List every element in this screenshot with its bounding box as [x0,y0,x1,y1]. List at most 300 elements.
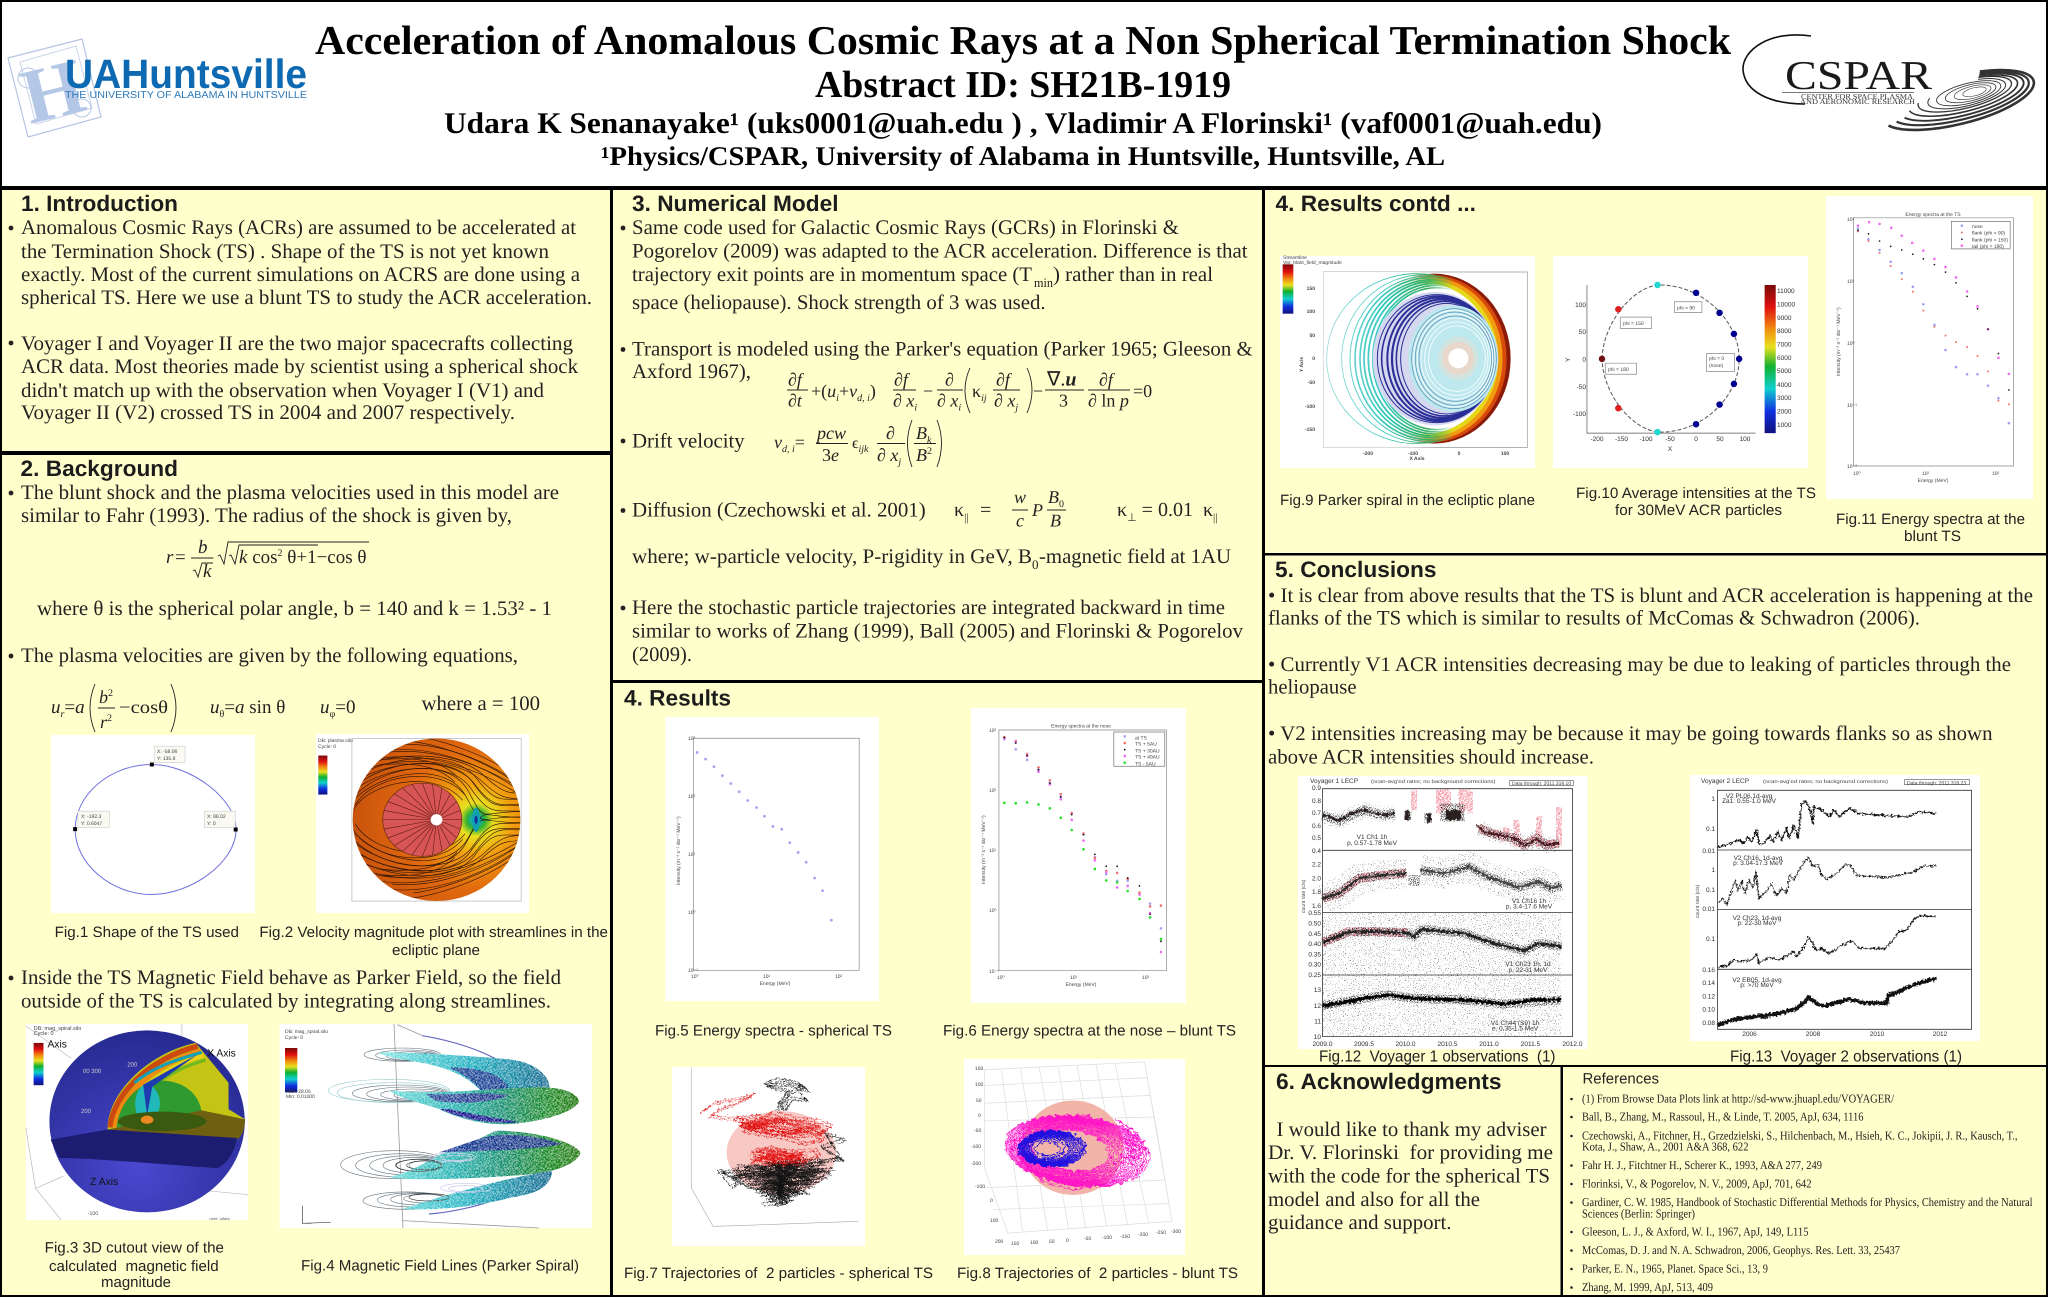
figure 4: parker spiral [280,1024,592,1228]
equation: plasma velocities: 2 [107,713,112,724]
figure 8: trajectories blunt: 100 [975,1082,984,1088]
equation: diffusion: κ [1117,499,1127,521]
figure 13: voyager 2: Voyager 2 LECP [1701,778,1749,785]
equation: parker transport: ∇.u [1046,369,1077,391]
figure 9: parker spiral ecliptic: Var: blast_field_magnitude [1283,260,1342,266]
figure 9: parker spiral ecliptic: -100 [1408,451,1418,457]
figure 11: blunt TS spectra: tail (phi = 180) [1972,244,2004,250]
text block: introduction bullets: spherical TS. Here we use a blunt TS to study the ACR acceleration. [21,287,592,309]
equation: diffusion: || [964,512,968,524]
figure 3: 3D cutout: Axis [47,1038,67,1050]
equation: shock radius: k cos [239,547,278,568]
figure 12: voyager 1: V1 Ch23 1h, 1d [1505,961,1551,968]
figure 12: voyager 1: 0.50 [1308,920,1321,928]
text block: reference list: Florinksi, V., & Pogorelov, N. V., 2009, ApJ, 701, 642 [1582,1177,1812,1191]
figure 11: blunt TS spectra: 10⁰ [1853,471,1861,477]
figure 3: 3D cutout: Z Axis [90,1175,118,1187]
text block: acknowledgments: model and also for all the [1268,1189,1480,1211]
figure 1: shape of TS: Y: 135.8 [157,756,176,762]
panel: 2. Background [2,455,610,1295]
figure 8: trajectories blunt: 150 [975,1066,984,1072]
text block: same code: space (heliopause). Shock strength of 3 was used. [632,292,1046,314]
figure 3: 3D cutout: X Axis [207,1047,236,1059]
figure 8: trajectories blunt: -200 [1138,1232,1148,1238]
text block: stochastic: (2009). [632,644,692,666]
figure 13: voyager 2: 0.08 [1702,1020,1715,1027]
figure 8: trajectories blunt: 100 [1030,1240,1039,1246]
figure 9: parker spiral ecliptic: 150 [1307,286,1315,292]
text block: where w-particle: 0 [1032,557,1038,572]
text block: introduction bullets: Voyager I and Voyager II are the two major spacecrafts collecting [21,333,573,355]
figure 12: voyager 1: 1.8 [1312,889,1321,896]
figure 13: voyager 2 [1690,775,1980,1041]
figure 12: voyager 1: p, 0.57-1.78 MeV [1347,840,1398,847]
equation: parker transport: − [923,381,933,401]
text block: introduction bullets: exactly. Most of the current simulations on ACRS are done using a [21,264,580,286]
logo: CSPAR: AND AERONOMIC RESEARCH [1800,97,1916,106]
figure 1: shape of TS: Y: 0 [207,821,216,827]
figure 12: voyager 1: 11 [1314,1018,1321,1026]
figure 6: blunt spectra: Energy spectra at the nose [1051,724,1111,730]
equation: diffusion: || [1213,512,1217,524]
text block: where theta: where θ is the spherical polar angle, b = 140 and k = 1.53² - 1 [37,598,552,620]
figure 8: trajectories blunt: -300 [1171,1229,1181,1235]
equation: shock radius: b [198,537,208,558]
figure 6: blunt spectra: 10¹ [1070,975,1078,981]
figure 10: average intensities: X [1668,446,1673,453]
equation: parker transport: i [836,393,839,404]
figure 13: voyager 2: Za1: 0.55-1.0 MeV [1722,798,1777,805]
caption: fig 9: Fig.9 Parker spiral in the ecliptic plane [1280,492,1535,509]
figure 8: trajectories blunt: 50 [976,1098,982,1104]
text block: acknowledgments: with the code for the spherical TS [1268,1166,1550,1188]
equation: drift velocity: ijk [858,444,869,455]
figure 8: trajectories blunt: 0 [978,1113,981,1119]
equation: drift velocity: ϵ [852,435,858,452]
equation: plasma velocities: =0 [335,697,356,718]
equation: plasma velocities: = [224,697,235,718]
figure 13: voyager 2: 0.1 [1706,826,1715,833]
figure 5: spherical spectra: Energy (MeV) [760,981,791,987]
caption: fig 8: Fig.8 Trajectories of 2 particles - blunt TS [957,1265,1238,1282]
figure 5: spherical spectra: 10⁰ [691,974,699,980]
equation: parker transport: v [849,381,857,401]
figure 6: blunt spectra: 10¹ [989,848,997,854]
figure 6: blunt spectra: 10² [1142,975,1150,981]
figure 12: voyager 1: Data through: 2011.319.10 [1512,781,1571,787]
figure 9: parker spiral ecliptic: -50 [1308,380,1315,386]
figure 13: voyager 2: 0.10 [1702,1006,1715,1014]
caption: fig 12: Fig.12 Voyager 1 observations (1) [1319,1049,1556,1066]
figure 9: parker spiral ecliptic: 50 [1309,333,1315,339]
figure 10: average intensities: phi = 90 [1677,306,1695,312]
figure 6: blunt spectra: Intensity (m⁻² s⁻¹ dsr⁻¹ MeV⁻¹) [981,815,987,884]
logo: UAHuntsville: UAHuntsville [65,51,307,97]
caption: fig 2: ecliptic plane [392,942,480,959]
figure 12: voyager 1: 2010.5 [1438,1041,1458,1048]
text block: parker field: Inside the TS Magnetic Field behave as Parker Field, so the field [21,967,562,989]
equation: parker transport: ∂ ln p [1088,391,1129,411]
figure 10: average intensities: phi = 0 [1709,356,1724,362]
panel: 5. Conclusions [1265,556,2046,1066]
figure 12: voyager 1: V1 Ch1 1h [1357,834,1388,841]
equation: plasma velocities: a [75,697,85,718]
equation: parker transport: κ [972,381,981,401]
figure 6: blunt spectra: TS - 5AU [1135,762,1156,768]
equation: parker transport: j [1013,403,1018,414]
caption: fig 13: Fig.13 Voyager 2 observations (1) [1730,1049,1962,1066]
figure 9: parker spiral ecliptic: 100 [1307,309,1315,315]
text block: transport [621,339,1253,383]
equation: shock radius: r [166,547,174,568]
equation: plasma velocities: where a = 100 [422,693,540,715]
text block: same code: Pogorelov (2009) was adapted to the ACR acceleration. Difference is that [632,241,1248,263]
figure 12: voyager 1: 2.0 [1312,876,1321,882]
text block: stochastic [621,597,1244,666]
text block: conclusion bullets [1268,585,2033,769]
figure 10: average intensities: -50 [1665,436,1675,443]
logo: CSPAR: CSPAR [1785,52,1933,98]
figure 12: voyager 1: 10 [1314,1034,1321,1041]
text block: blunt shock [9,482,559,527]
figure 10: average intensities: phi = 150 [1623,321,1644,327]
figure 7: trajectories spherical [672,1067,865,1246]
equation: parker transport: ∂f [996,370,1013,390]
equation: diffusion: κ [954,499,964,521]
figure 10: average intensities: -100 [1639,436,1653,443]
equation: plasma velocities: u [210,697,220,718]
figure 10: average intensities: 7000 [1777,342,1792,348]
text block: reference list: Kota, J., Shaw, A., 2001 A&A 368, 622 [1582,1140,1748,1154]
figure 12: voyager 1: 0.8 [1312,798,1321,805]
panel: 1. Introduction [2,190,610,451]
equation: drift velocity: 3e [822,445,839,465]
figure 12: voyager 1: 12 [1314,1003,1321,1010]
equation: diffusion: P [1031,500,1043,520]
caption: fig 3: magnitude [101,1274,171,1291]
figure 9: parker spiral ecliptic: X Axis [1409,456,1425,462]
equation: drift velocity: B [916,445,927,465]
text block: where w-particle: where; w-particle velocity, P-rigidity in GeV, B [632,546,1032,568]
figure 4: parker spiral: Max: 28.05 [286,1089,311,1095]
equation: drift velocity: = [795,432,805,452]
figure 11: blunt TS spectra: Energy (MeV) [1918,478,1949,484]
figure 3: 3D cutout: 200 [81,1108,91,1115]
figure 13: voyager 2: 0.1 [1706,936,1715,943]
caption: fig 10 [1576,485,1816,519]
equation: parker transport: ∂f [894,370,911,390]
figure 3: 3D cutout: Cycle: 0 [34,1030,54,1036]
equation: plasma velocities: r [100,712,107,732]
equation: shock radius: k [203,561,212,582]
heading: results contd: 4. Results contd ... [1276,191,1476,216]
text block: plasma velocities: The plasma velocities are given by the following equations, [21,645,518,667]
figure 2: velocity magnitude [316,734,529,913]
figure 12: voyager 1: 0.6 [1312,823,1321,830]
text block: introduction bullets: Voyager II (V2) crossed TS in 2004 and 2007 respectively. [21,402,515,424]
figure 10: average intensities: -200 [1590,436,1604,443]
figure 13: voyager 2: 0.1 [1706,887,1715,894]
figure 5: spherical spectra: 10¹ [688,852,696,858]
figure 11: blunt TS spectra: 10¹ [1922,471,1930,477]
text block: parker field [9,967,562,1012]
figure 8: trajectories blunt: -200 [971,1161,981,1167]
caption: fig 3 [45,1240,224,1291]
text block: acknowledgments [1268,1119,1553,1234]
equation: plasma velocities: 2 [108,688,113,699]
text block: conclusion bullets: heliopause [1268,677,1356,699]
panel: 6. Acknowledgments [1265,1067,1560,1295]
equation: drift velocity: B [916,423,927,443]
text block: acknowledgments: Dr. V. Florinski for providing me [1268,1142,1553,1164]
figure 11: blunt TS spectra: 10⁻² [1847,464,1857,470]
text block: reference list: Zhang, M. 1999, ApJ, 513, 409 [1582,1280,1713,1294]
figure 1: shape of TS: X: -58.06 [157,749,178,755]
figure 12: voyager 1: V1 Ch44 (S9) 1h [1491,1020,1540,1027]
text block: reference list: Ball, B., Zhang, M., Rassoul, H., & Linde, T. 2005, ApJ, 634, 1116 [1582,1110,1864,1124]
figure 13: voyager 2: 1 [1711,867,1715,874]
text block: acknowledgments: guidance and support. [1268,1212,1452,1234]
figure 13: voyager 2: V2 Ch16, 1d-avg [1734,855,1783,862]
equation: diffusion: B [1050,511,1061,531]
figure 10: average intensities: 2000 [1777,408,1792,416]
equation: diffusion: 0 [1059,499,1064,510]
figure 12: voyager 1: 0.5 [1312,835,1321,842]
figure 13: voyager 2: 0.12 [1702,994,1715,1000]
figure 12: voyager 1: 2011.5 [1521,1041,1541,1048]
panel: 4. Results contd [1265,190,2046,553]
figure 8: trajectories blunt: -100 [1102,1235,1112,1241]
equation: plasma velocities [51,684,540,732]
text block: where w-particle: -magnetic field at 1AU [1039,546,1231,568]
figure 8: trajectories blunt: 100 [990,1218,999,1224]
equation: diffusion [954,487,1217,531]
equation: drift velocity: d, i [782,444,795,455]
figure 13: voyager 2: 2010 [1870,1031,1885,1038]
caption: fig 2 [259,924,608,959]
heading: introduction: 1. Introduction [21,191,178,216]
text block: reference list: Fahr H. J., Fitchtner H., Scherer K., 1993, A&A 277, 249 [1582,1158,1822,1172]
figure 8: trajectories blunt: 150 [1011,1241,1020,1247]
heading: numerical model: 3. Numerical Model [632,191,838,216]
figure 5: spherical spectra: 10² [688,794,696,800]
figure 12: voyager 1: 0.4 [1312,848,1321,855]
figure 11: blunt TS spectra: 10² [1847,217,1855,223]
figure 3: 3D cutout [26,1024,248,1221]
figure 12: voyager 1: 2009.0 [1313,1041,1333,1048]
figure 3: 3D cutout: 200 [127,1061,137,1068]
figure 9: parker spiral ecliptic: -150 [1305,427,1315,433]
text block: conclusion bullets: • Currently V1 ACR intensities decreasing may be due to leaking of particles through the [1268,654,2011,676]
figure 6: blunt spectra: 10⁻¹ [989,969,999,975]
figure 12: voyager 1: count rate (c/s) [1301,879,1307,913]
figure 5: spherical spectra: 10⁻¹ [688,968,698,974]
abstract id: Abstract ID: SH21B-1919 [815,64,1231,106]
text block: parker field: outside of the TS is calculated by integrating along streamlines. [21,990,551,1012]
text block: introduction bullets: didn't match up with the observation when Voyager I (V1) and [21,380,545,402]
figure 6: blunt spectra: Energy (MeV) [1066,982,1097,988]
figure 6: blunt spectra: TS + 30AU [1135,748,1160,754]
figure 10: average intensities: 0 [1582,356,1586,364]
caption: fig 10: for 30MeV ACR particles [1615,502,1782,519]
equation: plasma velocities: −cosθ [119,697,168,717]
figure 11: blunt TS spectra: Intensity (m⁻² s⁻¹ dsr⁻¹ MeV⁻¹) [1836,307,1842,376]
figure 8: trajectories blunt: -250 [1156,1230,1166,1236]
figure 12: voyager 1: p, 3.4-17.6 MeV [1506,904,1553,910]
equation: parker transport: − [1033,381,1043,401]
text block: same code: trajectory exit points are in momentum space (T [632,264,1032,286]
figure 3: 3D cutout: user: udara [210,1216,230,1221]
equation: shock radius: 2 [278,548,283,559]
caption: fig 3: Fig.3 3D cutout view of the [45,1240,224,1257]
text block: acknowledgments: I would like to thank my adviser [1276,1119,1547,1141]
text block: same code: Same code used for Galactic Cosmic Rays (GCRs) in Florinski & [632,217,1179,239]
figure 5: spherical spectra: 10² [835,974,843,980]
figure 10: average intensities: 4000 [1777,382,1792,389]
header banner [2,2,2046,186]
figure 10: average intensities: -100 [1573,411,1586,418]
figure 13: voyager 2: 1 [1711,796,1715,803]
figure 8: trajectories blunt: -50 [1084,1236,1091,1242]
figure 10: average intensities: 1000 [1777,422,1792,429]
equation: parker transport: + [839,381,849,401]
figure 10: average intensities: -50 [1577,384,1586,391]
figure 6: blunt spectra: 10⁰ [989,908,997,914]
text block: conclusion bullets: flanks of the TS which is similar to results of McComas & Schwadron (2006). [1268,608,1920,630]
figure 9: parker spiral ecliptic: -200 [1363,451,1373,457]
figure 12: voyager 1: p, 22-31 MeV [1508,967,1548,974]
figure 6: blunt spectra: TS + 5AU [1135,742,1157,748]
figure 6: blunt spectra: 10² [989,788,997,794]
logo: UAHuntsville: H [13,41,93,140]
affiliation: ¹Physics/CSPAR, University of Alabama in Huntsville, Huntsville, AL [601,141,1445,171]
figure 13: voyager 2: 2008 [1806,1031,1821,1038]
figure 8: trajectories blunt: 0 [990,1198,993,1204]
figure 11: blunt TS spectra: 10² [1992,471,2000,477]
figure 11: blunt TS spectra: 10⁰ [1847,341,1855,347]
figure 1: shape of TS [51,735,255,913]
figure 13: voyager 2: Data through: 2011.319.23 [1907,780,1966,786]
figure 8: trajectories blunt: -100 [971,1144,981,1150]
text block: blunt shock: The blunt shock and the plasma velocities used in this model are [21,482,559,504]
figure 12: voyager 1: 13 [1314,987,1321,994]
figure 1: shape of TS: X: -192.3 [81,814,102,820]
equation: parker transport: =0 [1133,381,1152,401]
figure 5: spherical spectra: Intensity (m⁻² s⁻¹ dsr⁻¹ MeV⁻¹) [676,816,682,885]
figure 10: average intensities: 5000 [1777,368,1792,375]
figure 8: trajectories blunt: 50 [1049,1239,1055,1245]
logo: CSPAR: CENTER FOR SPACE PLASMA [1801,92,1914,101]
heading: references: References [1582,1070,1659,1087]
figure 3: 3D cutout: -100 [88,1210,98,1216]
equation: parker transport: ∂ [945,370,954,390]
figure 12: voyager 1: 2011.0 [1479,1041,1499,1048]
equation: drift velocity: v [774,432,782,452]
figure 10: average intensities: 6000 [1777,355,1792,362]
figure 11: blunt TS spectra: 10⁻¹ [1847,403,1857,409]
figure 13: voyager 2: (scan-avg'ed rates; no background corrections) [1763,779,1888,785]
text block: transport: Axford 1967), [632,361,751,383]
figure 13: voyager 2: 0.01 [1702,906,1715,913]
equation: parker transport: ∂f [788,370,805,390]
equation: drift velocity: 2 [927,446,932,457]
figure 13: voyager 2: 0.14 [1702,980,1715,987]
title: Acceleration of Anomalous Cosmic Rays at a Non Spherical Termination Shock [315,17,1731,63]
figure 8: trajectories blunt: -100 [975,1184,985,1190]
caption: fig 6: Fig.6 Energy spectra at the nose – blunt TS [943,1022,1236,1040]
text block: introduction bullets [9,217,592,424]
figure 12: voyager 1: e, 0.35-1.5 MeV [1492,1026,1539,1032]
equation: parker transport [787,368,1152,414]
equation: parker transport: ij [981,393,987,404]
equation: parker transport: ∂ x [893,391,914,411]
figure 6: blunt spectra: 10⁰ [997,975,1005,981]
equation: diffusion: B [1048,487,1059,507]
text block: transport: Transport is modeled using the Parker's equation (Parker 1965; Gleeson & [632,339,1253,361]
text block: same code: ) rather than in real [1053,264,1213,286]
figure 12: voyager 1: 2012.0 [1563,1041,1583,1048]
figure 13: voyager 2: p: 3.04-17.3 MeV [1733,860,1784,867]
text block: drift: Drift velocity [632,431,745,453]
equation: parker transport: 3 [1059,391,1068,411]
figure 10: average intensities: 50 [1716,436,1724,443]
figure 5: spherical spectra: 10¹ [763,974,771,980]
figure 10: average intensities: 100 [1740,436,1751,443]
figure 9: parker spiral ecliptic [1280,255,1535,468]
heading: acknowledgments: 6. Acknowledgments [1276,1069,1502,1094]
figure 4: parker spiral: Min: 0.01000 [286,1094,315,1100]
figure 12: voyager 1: 0.40 [1308,941,1321,948]
figure 10: average intensities: 50 [1579,329,1586,336]
figure 13: voyager 2: 0.01 [1702,848,1715,855]
equation: diffusion: = [980,499,991,521]
figure 13: voyager 2: 2006 [1742,1031,1757,1038]
text block: reference list: Sciences (Berlin: Springer) [1582,1206,1695,1220]
logo: UAHuntsville [8,39,307,140]
figure 10: average intensities: 100 [1575,302,1586,309]
text block: stochastic: Here the stochastic particle trajectories are integrated backward in time [632,597,1225,619]
heading: results: 4. Results [624,686,731,711]
equation: drift velocity: k [927,435,932,446]
equation: drift velocity [774,420,942,468]
figure 3: 3D cutout: DB: mag_spiral.silo [34,1025,81,1031]
figure 9: parker spiral ecliptic: 0 [1458,451,1461,457]
figure 10: average intensities: 3000 [1777,395,1792,402]
panel: 4. Results [613,683,1262,1295]
figure 9: parker spiral ecliptic: 0 [1312,356,1315,362]
figure 10: average intensities: -150 [1615,436,1628,443]
text block: conclusion bullets: above ACR intensities should increase. [1268,747,1594,769]
figure 6: blunt spectra [971,708,1186,1003]
figure 13: voyager 2: 0.16 [1702,967,1715,974]
equation: plasma velocities: = [64,697,75,718]
figure 9: parker spiral ecliptic: Y Axis [1299,357,1305,372]
equation: plasma velocities: u [320,697,330,718]
panel: references [1563,1067,2046,1295]
figure 11: blunt TS spectra: Energy spectra at the TS [1905,212,1961,218]
equation: parker transport: ∂ x [937,391,958,411]
caption: fig 11 [1836,511,2025,545]
figure 13: voyager 2: count rate (c/s) [1695,884,1701,918]
figure 3: 3D cutout: 00 300 [83,1068,101,1075]
equation: parker transport: i [914,403,917,414]
figure 12: voyager 1: 0.9 [1312,785,1321,792]
logo: UAHuntsville: THE UNIVERSITY OF ALABAMA IN HUNTSVILLE [65,90,307,101]
caption: fig 3: calculated magnetic field [49,1258,219,1275]
figure 10: average intensities: 11000 [1777,288,1795,295]
figure 9: parker spiral ecliptic: Streamline [1283,255,1307,261]
figure 6: blunt spectra: TS + 40AU [1135,754,1160,760]
